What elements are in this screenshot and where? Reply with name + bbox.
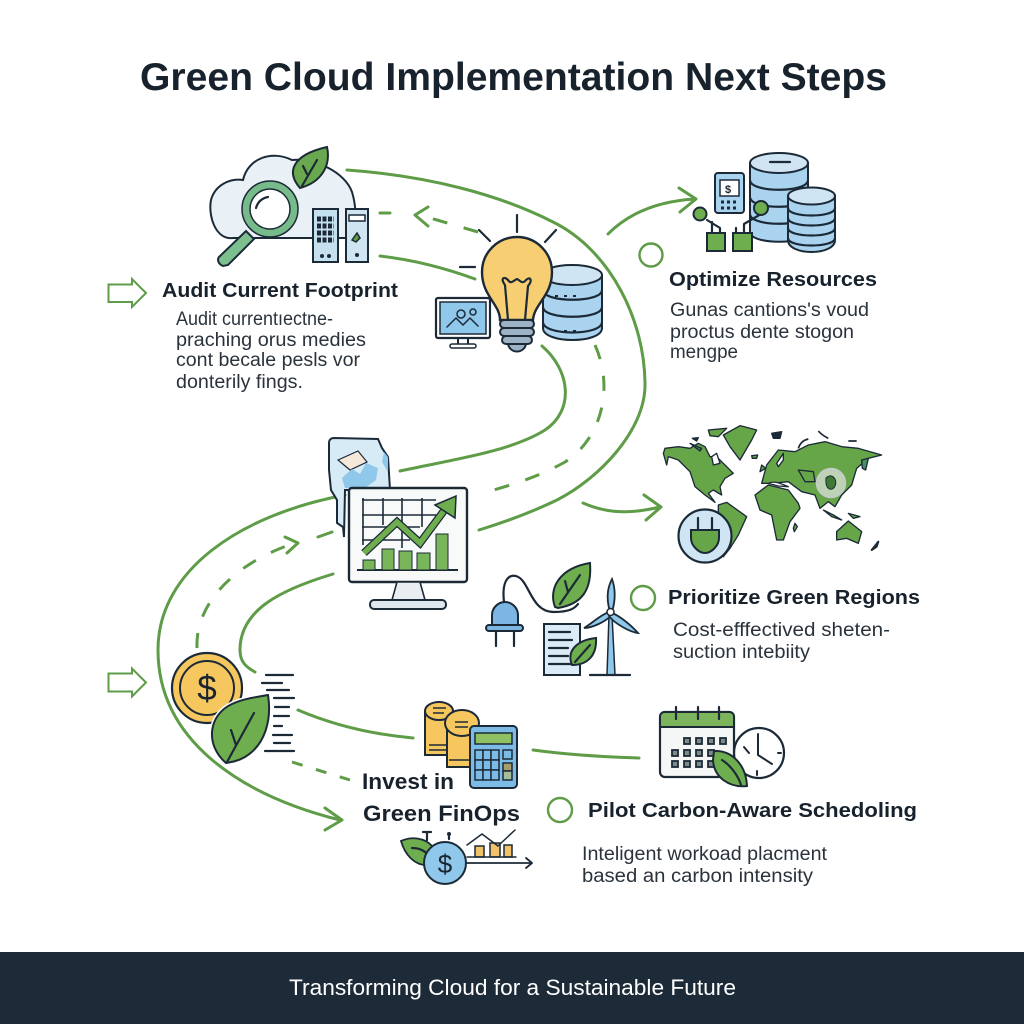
step: invest in green finops text: Green FinOps	[363, 801, 520, 826]
icon: chart monitor with map document	[329, 438, 467, 609]
arrow marker: audit step	[108, 279, 146, 307]
step: prioritize green regions text: Cost-efffectived sheten-	[673, 620, 890, 641]
arrow marker: finops step	[108, 668, 146, 696]
marker: prioritize green regions	[631, 586, 655, 610]
icon: calendar with clock and leaf	[660, 707, 784, 786]
marker: optimize resources	[640, 244, 662, 266]
step: audit current footprint text	[162, 280, 398, 393]
icon: optimize resources, phone, databases and chips: $	[725, 184, 731, 196]
icon: plug, leaf, document and wind turbine	[486, 563, 638, 675]
footer band: Transforming Cloud for a Sustainable Future	[289, 975, 736, 1000]
step: optimize resources text: mengpe	[670, 342, 738, 363]
flow arrows connecting the steps	[158, 170, 696, 830]
step: optimize resources text: Optimize Resources	[669, 269, 877, 291]
icon: light bulb, database and monitor	[436, 215, 602, 352]
step: audit current footprint text: Audit currentıectne-	[176, 309, 333, 330]
step: audit current footprint text: cont becale pesls vor	[176, 350, 361, 371]
icon: coin and leaf with lines: $	[197, 669, 217, 708]
icon: optimize resources, phone, databases and chips	[694, 153, 835, 252]
step: optimize resources text: Gunas cantions's voud	[670, 300, 869, 321]
step: prioritize green regions text	[668, 587, 920, 663]
step: pilot carbon-aware scheduling text: Pilot Carbon-Aware Schedoling	[588, 800, 917, 822]
icon: coin stacks and calculator	[425, 702, 517, 788]
step: optimize resources text	[669, 269, 877, 363]
marker: pilot carbon-aware scheduling	[548, 798, 572, 822]
title: Green Cloud Implementation Next Steps	[140, 56, 887, 99]
step: audit current footprint text: Audit Current Footprint	[162, 280, 398, 302]
step: audit current footprint text: donterily fings.	[176, 372, 303, 393]
step: audit current footprint text: praching orus medies	[176, 330, 366, 351]
step: invest in green finops text	[362, 769, 520, 826]
icon: audit cloud with magnifier and servers	[210, 147, 368, 266]
step: pilot carbon-aware scheduling text: Inteligent workoad placment	[582, 844, 828, 865]
icon: small coin, leaf and growth chart	[401, 830, 532, 884]
step: optimize resources text: proctus dente stogon	[670, 322, 854, 343]
step: invest in green finops text: Invest in	[362, 769, 454, 794]
icon: world map with plug badge	[663, 426, 882, 562]
step: prioritize green regions text: Prioritize Green Regions	[668, 587, 920, 609]
step: pilot carbon-aware scheduling text: based an carbon intensity	[582, 866, 814, 887]
footer band	[0, 952, 1024, 1024]
step: pilot carbon-aware scheduling text	[582, 800, 917, 887]
step: prioritize green regions text: suction intebiity	[673, 642, 811, 663]
icon: small coin, leaf and growth chart: $	[438, 849, 453, 879]
icon: coin and leaf with lines	[172, 653, 294, 763]
